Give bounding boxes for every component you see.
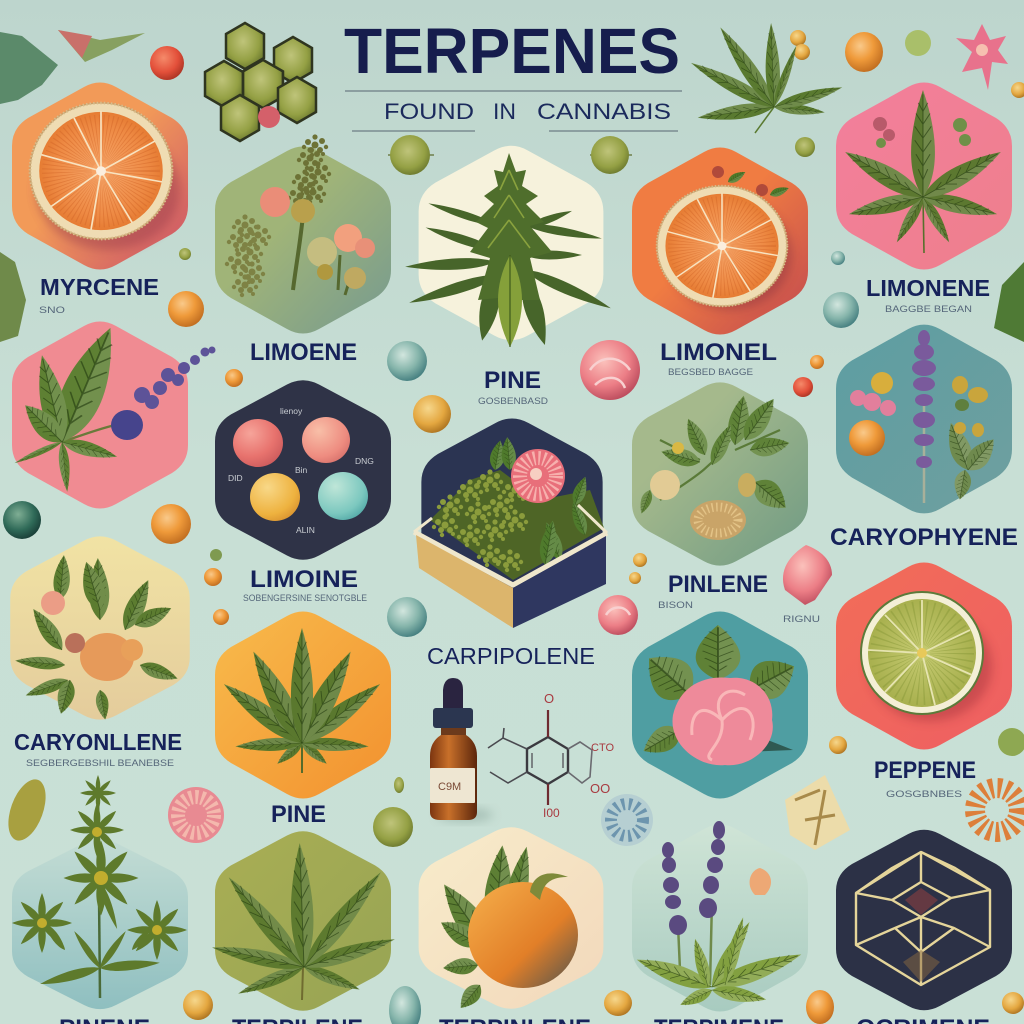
panel: cannabis leaf on olive [210,831,397,1011]
label: caryonllene: CARYONLLENE [14,729,182,755]
small caption text: SOBENGERSINE SENOTGBLE [243,593,367,603]
capsule captions: DID [228,473,243,483]
label: limoene 1: LIMOENE [250,339,357,366]
title block [344,15,682,131]
title: TERPENES [344,15,680,87]
small caption text: GOSGBNBES [886,789,962,799]
panel: pine cannabis plant on cream [405,146,613,348]
labels [14,274,1018,1024]
chart: molecule diagram: O [544,691,554,706]
label: caryophyene: CARYOPHYENE [830,524,1018,551]
small caption text: RIGNU [783,614,820,624]
label: limonel: LIMONEL [660,339,777,366]
label: pine 2: PINE [271,801,326,828]
panel: lavender stalks on pale green [632,821,808,1012]
chart: molecule diagram: OO [590,781,610,796]
capsule captions: lienoy [280,406,303,416]
icon: coral capsule [233,419,283,467]
label: myrcene: MYRCENE [40,274,159,300]
icon: honeycomb cluster [205,23,316,141]
chart: molecule diagram: I00 [543,806,560,820]
icon: essential oil bottle [430,678,493,822]
panel: gold geometric crystal on dark [836,830,1012,1010]
small caption text: BISON [658,600,693,610]
panel: planter box with flower [414,418,607,628]
small caption text: BAGGBE BEGAN [885,304,972,314]
panel: herb bouquet on green [215,134,391,334]
label: peppene: PEPPENE [874,757,976,784]
icon: teal capsule [318,472,368,520]
label: limoine: LIMOINE [250,566,358,593]
subtitle: IN [493,99,516,124]
chart: molecule diagram: CTO [591,742,614,754]
capsule captions [228,406,374,535]
chart: molecule diagram [488,691,614,820]
small caption text [26,304,972,799]
capsule captions: Bin [295,465,308,475]
panel: pine leaf on orange [215,612,391,798]
panel: dark with softgel capsules [215,380,391,560]
panel: orange fruit on cream [419,827,603,1013]
icon: top cannabis leaf [688,23,844,133]
label: pinlene: PINLENE [668,571,768,598]
panel: pink flower on teal [632,612,808,798]
panel: herb with fruit on cream [10,536,190,721]
small caption text: GOSBENBASD [478,396,549,406]
subtitle: CANNABIS [537,99,671,124]
panel: limonel orange slice [632,148,808,334]
panel: basil and lavender on pink [12,320,216,508]
small caption text: BEGSBED BAGGE [668,367,753,377]
small caption text: SNO [39,305,65,315]
capsule captions: ALIN [296,525,315,535]
panel: lavender and fruit on teal [836,325,1012,513]
icon: yellow capsule [250,473,300,521]
panel: sprigs and seed mound on green [632,382,808,566]
panel: limonene cannabis leaf on pink [836,82,1012,270]
panel: myrcene orange slice [12,82,188,270]
icon: salmon capsule [302,417,350,463]
label: pine 1: PINE [484,367,541,394]
panel: lime slice on coral [836,562,1012,750]
panel: hemp plant on pale teal [12,775,188,1009]
subtitle [384,99,671,124]
small caption text: SEGBERGEBSHIL BEANEBSE [26,758,174,768]
capsule captions: DNG [355,456,374,466]
label: carpipolene: CARPIPOLENE [427,643,595,669]
label: limonene: LIMONENE [866,275,990,301]
subtitle: FOUND [384,99,474,124]
icon: essential oil bottle: C9M [438,781,461,793]
